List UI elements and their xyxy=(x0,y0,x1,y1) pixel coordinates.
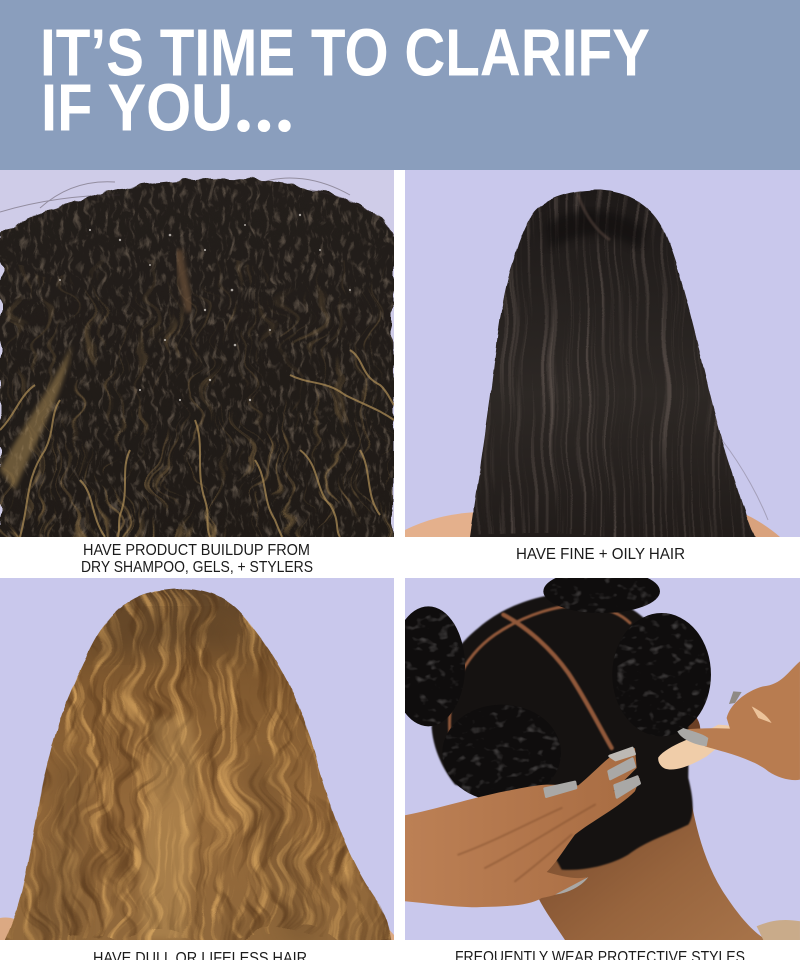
header band xyxy=(0,0,800,170)
title: IT’S TIME TO CLARIFY xyxy=(40,16,650,90)
title: ... xyxy=(234,64,296,148)
hand: right xyxy=(683,661,800,780)
hand shading xyxy=(458,805,595,881)
shoulders xyxy=(0,918,394,940)
neck xyxy=(539,804,764,940)
left nails xyxy=(545,748,640,895)
ear xyxy=(687,718,700,730)
sweater xyxy=(757,920,800,940)
title xyxy=(40,16,650,148)
caption: product buildup xyxy=(81,542,313,576)
caption: product buildup: DRY SHAMPOO, GELS, + STYLERS xyxy=(81,559,313,576)
caption: product buildup: HAVE PRODUCT BUILDUP FROM xyxy=(83,542,310,559)
right nails xyxy=(677,691,742,746)
styling clip xyxy=(658,725,738,770)
part lines xyxy=(450,605,630,748)
panel: dull or lifeless hair photo xyxy=(0,578,394,960)
shoulders xyxy=(405,512,780,537)
flyaway strands xyxy=(0,178,394,235)
panel: protective styles photo xyxy=(392,570,800,940)
title: IF YOU xyxy=(41,70,233,146)
head hair xyxy=(432,593,693,870)
hand: left xyxy=(405,748,640,907)
panel: product buildup photo xyxy=(0,170,394,560)
panel: fine and oily hair photo xyxy=(405,170,800,560)
golden curly strands xyxy=(0,350,394,537)
caption: fine and oily: HAVE FINE + OILY HAIR xyxy=(516,546,685,563)
product flakes xyxy=(59,214,351,401)
buns xyxy=(405,578,711,798)
